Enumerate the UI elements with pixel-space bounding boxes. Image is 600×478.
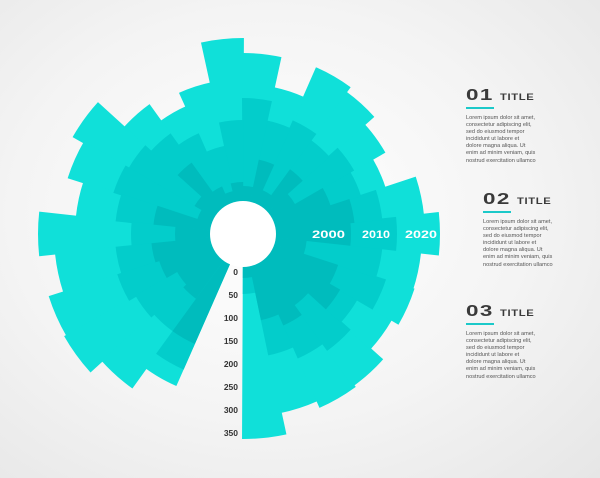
text block 02: consectetur adipiscing elit, [483,226,549,232]
text block 01: TITLE [500,92,534,102]
text block 03: dolore magna aliqua. Ut [466,359,525,365]
text block 02 [483,191,553,268]
scale labels: 50 [229,290,238,300]
text block 03: TITLE [500,308,534,318]
layer 2000 inner [164,155,322,313]
text block 02: Lorem ipsum dolor sit amet, [483,219,552,225]
text block 02: incididunt ut labore et [483,240,536,246]
text block 01: Lorem ipsum dolor sit amet, [466,115,535,121]
scale labels: 300 [224,405,238,415]
text block 02: enim ad minim veniam, quis [483,254,552,260]
text block 01: dolore magna aliqua. Ut [466,143,525,149]
text block 03: nostrud exercitation ullamco [466,374,536,380]
scale labels: 0 [233,267,238,277]
year labels: 2020 [405,229,437,241]
text block 01: 01 [466,87,494,104]
text block 02: dolore magna aliqua. Ut [483,247,542,253]
text block 02: sed do eiusmod tempor [483,233,541,239]
text block 03: Lorem ipsum dolor sit amet, [466,331,535,337]
year labels: 2010 [362,229,390,241]
scale labels: 350 [224,428,238,438]
scale labels: 250 [224,382,238,392]
text block 01: nostrud exercitation ullamco [466,158,536,164]
scale labels: 150 [224,336,238,346]
scale labels: 100 [224,313,238,323]
text block 02: TITLE [517,196,551,206]
year labels: 2000 [312,229,345,241]
text block 02: nostrud exercitation ullamco [483,262,553,268]
scale labels: 200 [224,359,238,369]
text block 03: incididunt ut labore et [466,352,519,358]
text block 01: consectetur adipiscing elit, [466,122,532,128]
text block 02: 02 [483,191,511,208]
text block 01: sed do eiusmod tempor [466,129,524,135]
text block 03: 03 [466,303,494,320]
layer 2020 outer [98,89,388,379]
center hole [210,201,276,267]
layer 2010 middle [141,132,345,336]
text block 03 [466,303,536,380]
text block 01 [466,87,536,164]
year labels [312,229,437,241]
text block 01: incididunt ut labore et [466,136,519,142]
text block 03: sed do eiusmod tempor [466,345,524,351]
text block 03: consectetur adipiscing elit, [466,338,532,344]
text block 01: enim ad minim veniam, quis [466,150,535,156]
text block 03: enim ad minim veniam, quis [466,366,535,372]
scale labels [224,267,238,438]
